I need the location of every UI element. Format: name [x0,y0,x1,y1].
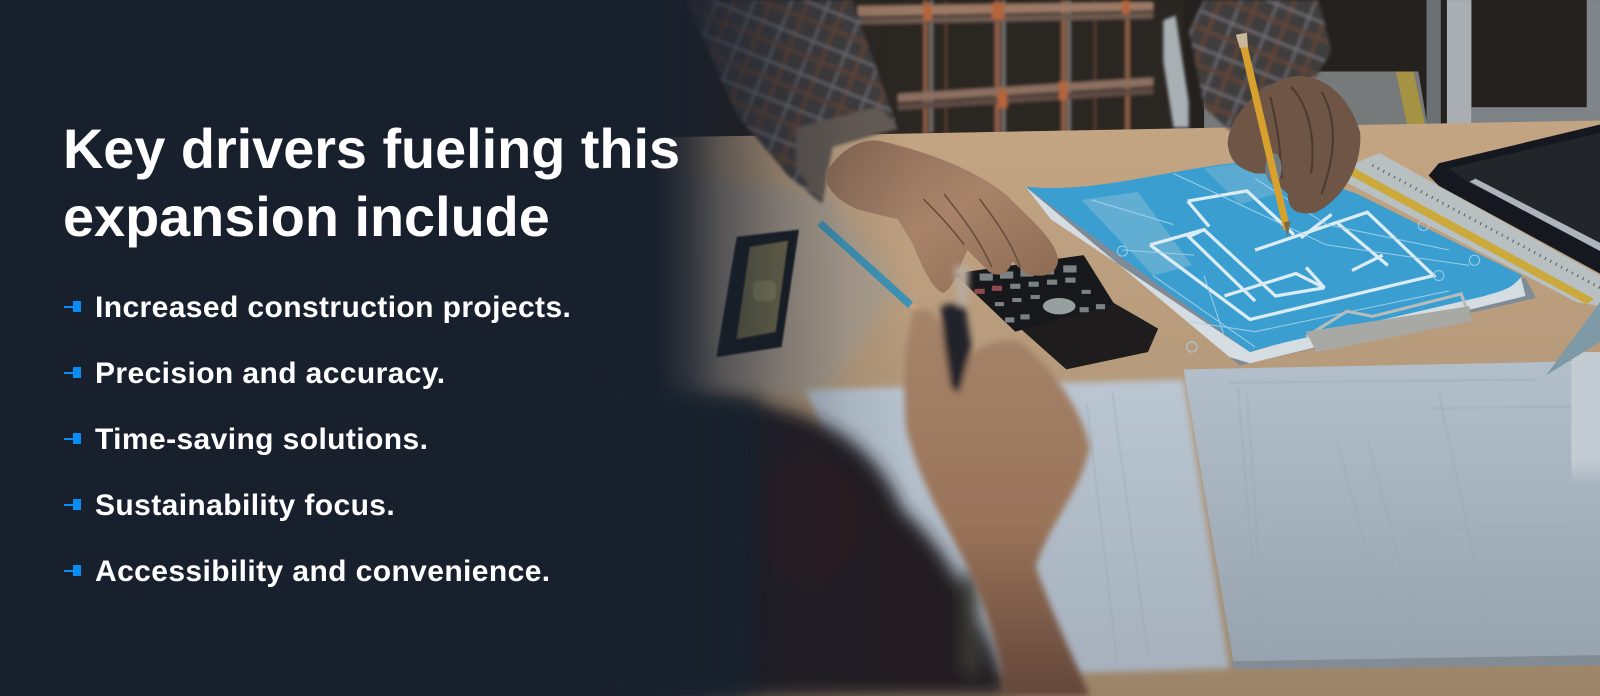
list item: sustainability focus: Sustainability focus. [95,489,395,522]
paper model house at the right edge [1546,302,1600,485]
title [63,117,680,248]
list item: increased construction projects: Increased construction projects. [95,291,571,324]
ruler [1345,153,1600,306]
clipboard and blueprint [1026,160,1536,365]
list item: accessibility and convenience: Accessibility and convenience. [95,555,551,588]
calculator [954,255,1158,369]
bullet list [64,291,571,588]
left hand resting on calculator [824,140,1058,293]
list item: precision and accuracy: Precision and accuracy. [95,357,445,390]
title: expansion include [63,185,550,248]
blue pencil [817,220,921,310]
floor plan drawing [1150,191,1434,319]
papers on the desk [806,360,1600,674]
title: Key drivers fueling this [63,117,680,180]
yellow pencil [1239,39,1290,231]
tablet [1429,125,1600,274]
foreground blurred head with dark hair [612,399,1010,696]
spirit level tool [716,230,799,357]
wooden desk [612,120,1600,696]
plaid shirt [847,0,1184,135]
metal clip [1306,294,1467,337]
plaid sleeves [686,0,1332,204]
right hand holding pencil [1228,33,1360,237]
list item: time-saving solutions: Time-saving solutions. [95,423,428,456]
backdrop behind the desk [612,0,1600,143]
foreground blurred hand [904,263,1090,696]
